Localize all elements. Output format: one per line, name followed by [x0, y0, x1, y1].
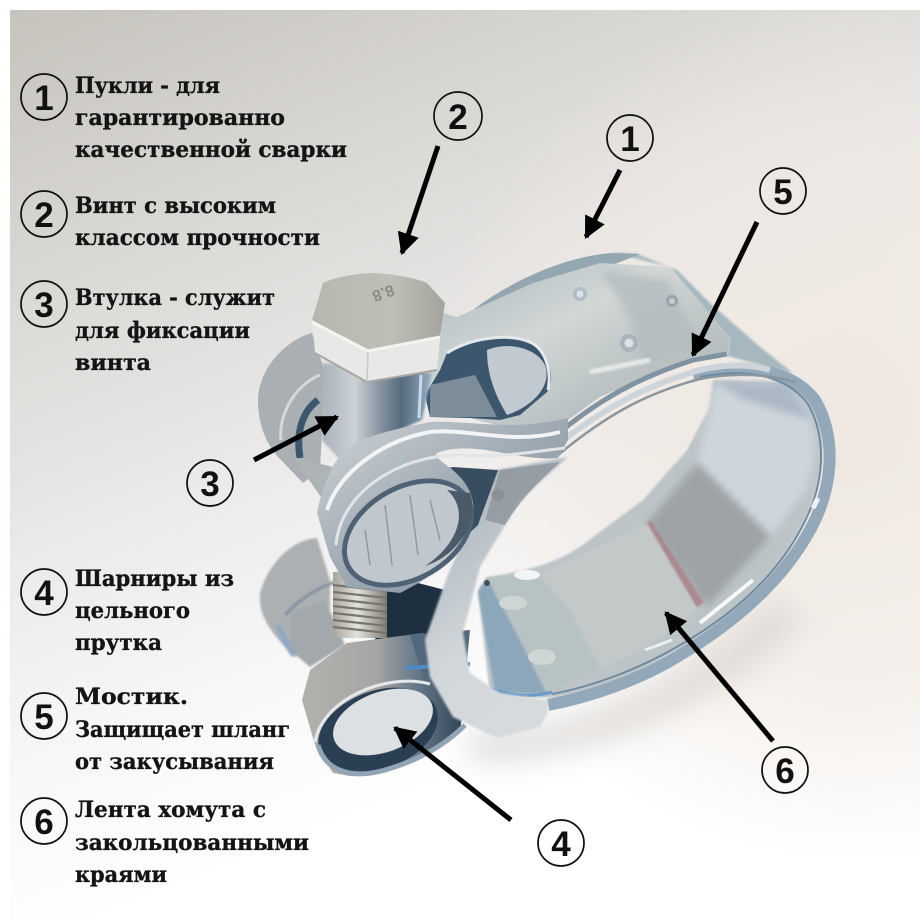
callout 3 with arrow — [187, 417, 337, 506]
rear lower loop — [260, 538, 345, 667]
callout 1 with arrow — [586, 115, 653, 237]
callout 4 with arrow — [395, 728, 584, 866]
legend item 5 — [21, 684, 290, 775]
callout 3 with arrow: 3 — [200, 465, 220, 504]
legend item 2: классом прочности — [75, 225, 320, 251]
legend item 1: качественной сварки — [75, 137, 347, 163]
legend item 1 — [21, 73, 347, 163]
legend item 5: Защищает шланг — [75, 717, 290, 743]
legend item 2 — [21, 191, 320, 251]
legend item 6: краями — [75, 862, 167, 888]
legend item 1: 1 — [34, 79, 54, 118]
callout 2 with arrow: 2 — [448, 98, 468, 137]
callout 2 with arrow — [402, 92, 482, 253]
legend item 5: 5 — [34, 698, 54, 737]
legend item 2: Винт с высоким — [75, 193, 276, 219]
legend item 1: Пукли - для — [75, 73, 220, 99]
legend item 4: прутка — [75, 630, 162, 656]
trunnion pin end — [329, 463, 487, 603]
legend item 2: 2 — [34, 196, 54, 235]
legend item 4: Шарниры из — [75, 566, 234, 592]
legend item 3: Втулка - служит — [75, 285, 275, 311]
front upper trunnion — [317, 418, 568, 610]
legend item 6: закольцованными — [75, 830, 309, 856]
callout 1 with arrow: 1 — [620, 120, 640, 159]
callout 6 with arrow — [666, 613, 808, 793]
callout 5 with arrow — [693, 168, 806, 355]
legend item 4 — [21, 566, 234, 656]
legend item 3 — [21, 281, 275, 376]
legend item 6: 6 — [34, 803, 54, 842]
legend item 1: гарантированно — [75, 105, 285, 131]
legend item 3: для фиксации — [75, 318, 250, 344]
band back edge behind bridge — [610, 252, 793, 373]
double edge of strap — [558, 354, 795, 455]
legend item 4: 4 — [34, 574, 54, 613]
legend item 5: Мостик. — [75, 684, 188, 710]
legend item 3: винта — [75, 350, 151, 376]
bridge strap — [425, 253, 730, 428]
threaded bolt section — [333, 572, 445, 660]
legend item 6 — [21, 797, 309, 888]
callout 5 with arrow: 5 — [773, 173, 793, 212]
legend item 4: цельного — [75, 598, 190, 624]
callout 6 with arrow: 6 — [775, 752, 795, 791]
shadow under clamp — [470, 610, 790, 746]
trunnion pin end — [324, 676, 442, 768]
head marking: 8.8 — [370, 281, 396, 304]
band front rim — [548, 369, 830, 705]
product photo: clamp illustration — [258, 252, 830, 788]
strap slot opening — [425, 337, 551, 420]
lower trunnion — [302, 630, 470, 788]
legend item 6: Лента хомута с — [75, 797, 266, 823]
callout 4 with arrow: 4 — [551, 825, 571, 864]
bolt head — [312, 273, 445, 382]
legend item 3: 3 — [34, 286, 54, 325]
wide left rim strip — [425, 457, 568, 738]
inner surface of band — [478, 380, 822, 698]
legend item 5: от закусывания — [75, 749, 274, 775]
weld spot — [492, 489, 504, 501]
rear upper loop — [258, 333, 340, 500]
bolt shank — [322, 363, 432, 460]
weld dimples — [573, 287, 678, 352]
